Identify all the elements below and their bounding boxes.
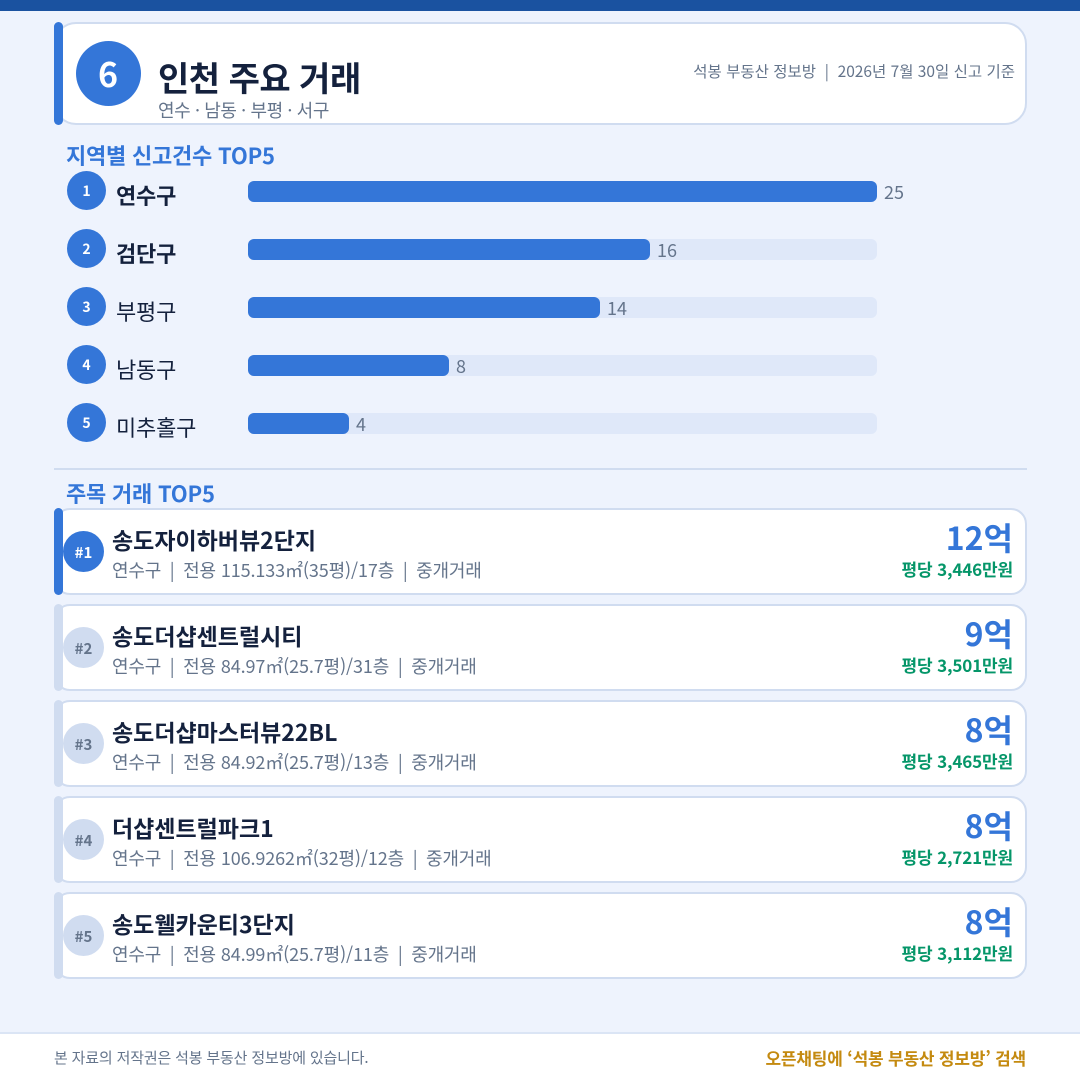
panel: header bbox=[54, 22, 1027, 125]
row 1: 1 bbox=[82, 181, 91, 201]
title: 인천 주요 거래 bbox=[158, 52, 361, 101]
section number badge bbox=[76, 41, 141, 106]
row 2: 2 bbox=[82, 239, 91, 259]
panel: deal 5: #5 bbox=[75, 926, 92, 946]
panel: deal 4: 더샵센트럴파크1 bbox=[112, 810, 274, 844]
heading: regional count: 지역별 신고건수 TOP5 bbox=[66, 139, 275, 171]
row 3 bbox=[67, 287, 877, 327]
row 2 bbox=[67, 229, 877, 269]
row 2: 검단구 bbox=[116, 237, 176, 269]
row 3: 14 bbox=[607, 295, 627, 321]
row 4: 4 bbox=[82, 355, 91, 375]
bar chart: regional count bbox=[67, 171, 904, 443]
row 1 bbox=[67, 171, 904, 211]
section number badge: 6 bbox=[98, 48, 118, 97]
row 3: 3 bbox=[82, 297, 91, 317]
panel: deal 3: 연수구 | 전용 84.92㎡(25.7평)/13층 | 중개거래 bbox=[112, 749, 477, 775]
copyright: 본 자료의 저작권은 석봉 부동산 정보방에 있습니다. bbox=[54, 1047, 368, 1068]
panel: deal 4: 연수구 | 전용 106.9262㎡(32평)/12층 | 중개거래 bbox=[112, 845, 492, 871]
panel: deal 4: #4 bbox=[75, 830, 92, 850]
header accent bbox=[54, 22, 63, 125]
panel: deal 3: #3 bbox=[75, 734, 92, 754]
row 5 bbox=[67, 403, 877, 443]
panel: deal 2: 연수구 | 전용 84.97㎡(25.7평)/31층 | 중개거래 bbox=[112, 653, 477, 679]
panel: deal 2 bbox=[54, 604, 1027, 691]
panel: deal 4: 8억 bbox=[965, 802, 1013, 848]
panel: deal 5: 8억 bbox=[965, 898, 1013, 944]
call to action: 오픈채팅에 ‘석봉 부동산 정보방’ 검색 bbox=[765, 1045, 1026, 1070]
footer bbox=[0, 1032, 1080, 1080]
row 2: 16 bbox=[657, 237, 677, 263]
heading: notable deals: 주목 거래 TOP5 bbox=[66, 477, 215, 509]
row 4: 8 bbox=[456, 353, 466, 379]
panel: deal 5: 평당 3,112만원 bbox=[902, 940, 1013, 965]
row 5: 미추홀구 bbox=[116, 411, 196, 443]
row 3: 부평구 bbox=[116, 295, 176, 327]
row 5: 5 bbox=[82, 413, 91, 433]
row 4 bbox=[67, 345, 877, 385]
panel: deal 3: 송도더샵마스터뷰22BL bbox=[112, 714, 337, 748]
panel: deal 1: 연수구 | 전용 115.133㎡(35평)/17층 | 중개거래 bbox=[112, 557, 482, 583]
row 1: 25 bbox=[884, 179, 904, 205]
panel: deal 5: 송도웰카운티3단지 bbox=[112, 906, 295, 940]
panel: deal 1: 12억 bbox=[946, 514, 1013, 560]
source note: 석봉 부동산 정보방 | 2026년 7월 30일 신고 기준 bbox=[693, 60, 1015, 82]
panel: deal 2: 9억 bbox=[965, 610, 1013, 656]
header card bbox=[54, 22, 1027, 125]
panel: deal 1: 평당 3,446만원 bbox=[902, 556, 1013, 581]
row 4: 남동구 bbox=[116, 353, 176, 385]
panel: deal 3 bbox=[54, 700, 1027, 787]
panel: deal 1: 송도자이하버뷰2단지 bbox=[112, 522, 316, 556]
panel: deal 4 bbox=[54, 796, 1027, 883]
panel: deal 3: 평당 3,465만원 bbox=[902, 748, 1013, 773]
row 5: 4 bbox=[356, 411, 366, 437]
panel: deal 4: 평당 2,721만원 bbox=[902, 844, 1013, 869]
panel: deal 5: 연수구 | 전용 84.99㎡(25.7평)/11층 | 중개거래 bbox=[112, 941, 477, 967]
top bar bbox=[0, 0, 1080, 11]
panel: deal 2: 송도더샵센트럴시티 bbox=[112, 618, 302, 652]
panel: deal 5 bbox=[54, 892, 1027, 979]
panel: deal 1: #1 bbox=[75, 542, 92, 562]
panel: deal 2: #2 bbox=[75, 638, 92, 658]
row 1: 연수구 bbox=[116, 179, 176, 211]
panel: deal 1 bbox=[54, 508, 1027, 595]
panel: deal 2: 평당 3,501만원 bbox=[902, 652, 1013, 677]
subtitle: 연수 · 남동 · 부평 · 서구 bbox=[158, 97, 329, 123]
panel: deal 3: 8억 bbox=[965, 706, 1013, 752]
